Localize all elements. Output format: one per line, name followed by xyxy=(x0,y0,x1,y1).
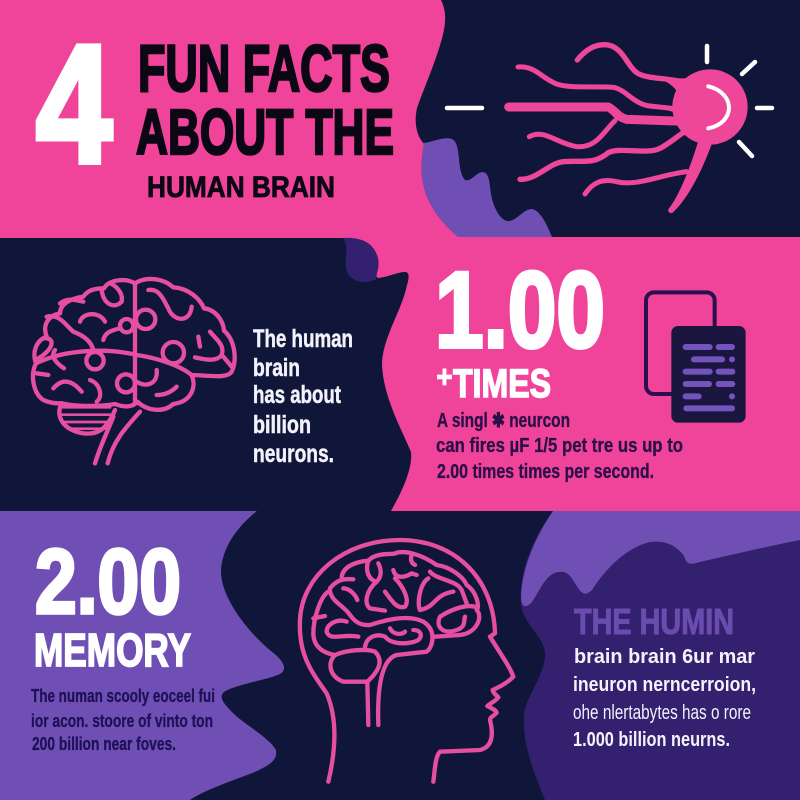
text block: human brain neurons: neurons. xyxy=(253,440,334,468)
heading: the humin: THE HUMIN xyxy=(574,601,734,642)
panel: middle pink band xyxy=(0,237,800,511)
decorative dark purple blob middle xyxy=(343,238,379,282)
icon: brain side view xyxy=(33,279,235,463)
title: fun facts about the human brain: FUN FACTS xyxy=(138,31,390,105)
panel: bottom navy base xyxy=(190,511,553,800)
decorative purple blob top xyxy=(422,138,552,237)
stat: 2.00 memory: MEMORY xyxy=(34,624,191,676)
panel: bottom left purple shape xyxy=(0,511,284,800)
text block: neuron firing xyxy=(436,410,683,483)
text block: neuron storage: brain brain 6ur mar xyxy=(574,646,755,668)
title: fun facts about the human brain xyxy=(136,31,394,204)
stat: 1.00 times: ⁺TIMES xyxy=(436,362,551,406)
text block: memory xyxy=(31,686,215,754)
title: fun facts about the human brain: ABOUT THE xyxy=(136,96,394,168)
text block: neuron storage: 1.000 billion neurns. xyxy=(573,729,730,751)
panel: top pink header background xyxy=(0,0,458,237)
icon: head with brain xyxy=(300,540,513,782)
text block: human brain neurons: brain xyxy=(253,354,300,382)
text block: neuron firing: 2.00 times times per second. xyxy=(437,461,654,483)
text block: human brain neurons xyxy=(253,325,353,468)
text block: neuron firing: A singl ✱ neurcon xyxy=(437,410,570,432)
stat: 1.00 times xyxy=(435,249,605,406)
text block: human brain neurons: billion xyxy=(253,411,311,439)
stat: 1.00 times: 1.00 xyxy=(435,249,605,370)
text block: neuron storage: ohe nlertabytes has o rore xyxy=(573,702,751,724)
text block: human brain neurons: The human xyxy=(253,325,353,353)
title number 4: 4 xyxy=(36,10,112,198)
title: fun facts about the human brain: HUMAN BRAIN xyxy=(147,171,335,204)
text block: memory: ior acon. stoore of vinto ton xyxy=(31,711,213,731)
panel: bottom right dark purple shape xyxy=(521,511,800,800)
stat: 2.00 memory: 2.00 xyxy=(35,531,181,633)
text block: human brain neurons: has about xyxy=(253,381,341,409)
text block: neuron storage xyxy=(573,646,756,751)
panel: middle navy shape xyxy=(0,238,411,511)
text block: neuron firing: can fires µF 1/5 pet tre us up to xyxy=(436,435,683,457)
text block: memory: 200 billion near foves. xyxy=(32,734,176,754)
decorative light purple wave bottom right xyxy=(521,511,800,606)
stat: 2.00 memory xyxy=(34,531,191,676)
text block: memory: The numan scooly eoceel fui xyxy=(31,686,215,706)
icon: overlapping cards xyxy=(646,292,746,423)
icon: neuron xyxy=(509,45,748,213)
text block: neuron storage: ineuron nerncerroion, xyxy=(573,674,756,696)
icon: neuron light rays xyxy=(447,46,772,156)
